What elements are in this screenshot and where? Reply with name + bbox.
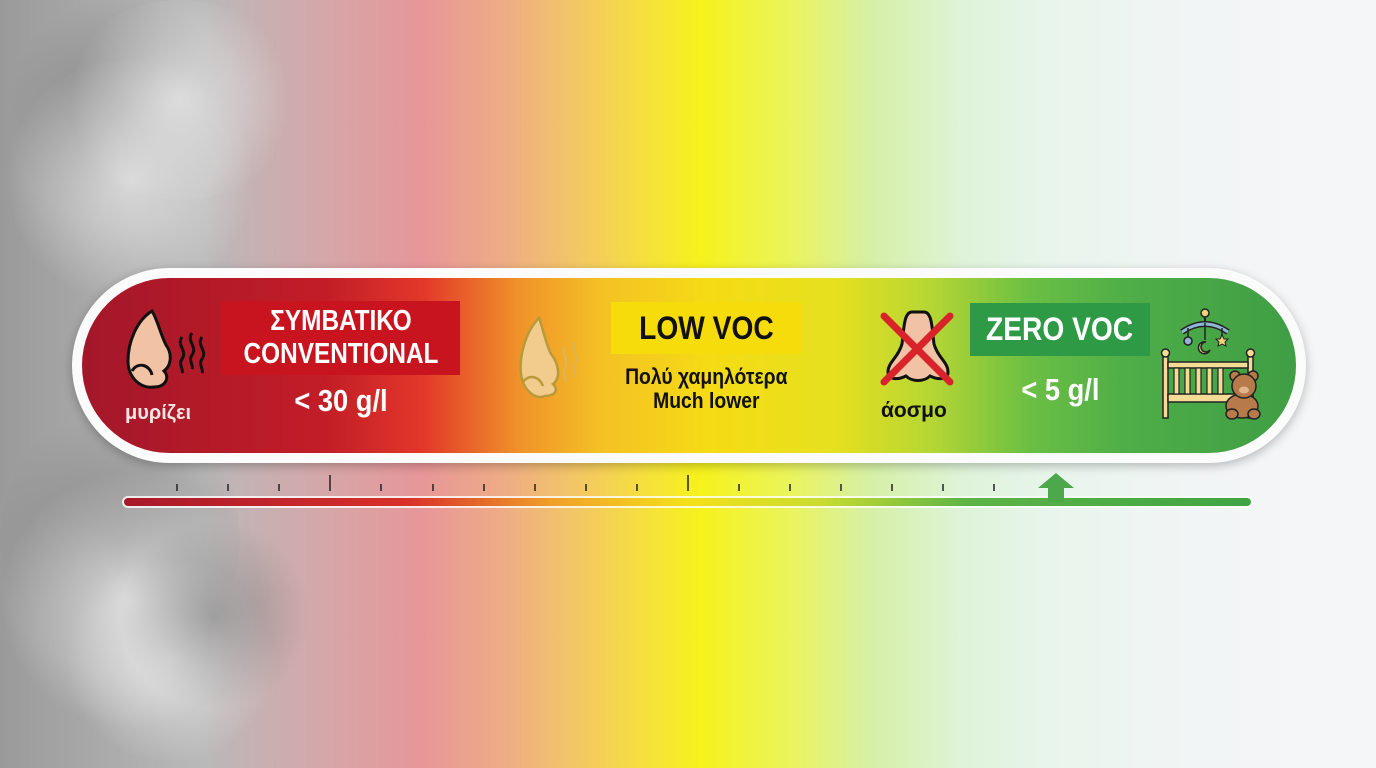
heading: ZERO VOC <box>970 303 1150 356</box>
icon: crib with teddy bear <box>1160 308 1261 420</box>
heading: ΣΥΜΒΑΤΙΚΟ CONVENTIONAL: CONVENTIONAL <box>243 338 438 370</box>
label: μυρίζει: μυρίζει <box>125 402 191 424</box>
icon: smelling nose <box>126 309 206 389</box>
panel: conventional <box>125 301 460 424</box>
background smoke <box>20 13 294 744</box>
value: < 30 g/l: < 30 g/l <box>294 383 387 418</box>
icon: faint nose <box>519 316 578 398</box>
icon: crossed nose <box>880 310 954 386</box>
heading: LOW VOC <box>611 302 801 354</box>
text: Πολύ χαμηλότερα Much lower: Much lower <box>653 388 759 413</box>
label: άοσμο: άοσμο <box>881 399 947 422</box>
heading: LOW VOC: LOW VOC <box>639 310 773 346</box>
panel: low voc <box>519 302 801 413</box>
arrow: zero voc marker <box>1038 473 1074 498</box>
main scale pill <box>72 268 1306 463</box>
heading: ΣΥΜΒΑΤΙΚΟ CONVENTIONAL <box>221 301 460 375</box>
scale bar with ticks <box>122 475 1253 508</box>
heading: ΣΥΜΒΑΤΙΚΟ CONVENTIONAL: ΣΥΜΒΑΤΙΚΟ <box>270 305 411 337</box>
heading: ZERO VOC: ZERO VOC <box>986 311 1134 347</box>
panel: zero voc <box>880 303 1261 422</box>
value: < 5 g/l: < 5 g/l <box>1021 372 1099 407</box>
text: Πολύ χαμηλότερα Much lower: Πολύ χαμηλότερα <box>625 364 787 389</box>
text: Πολύ χαμηλότερα Much lower <box>625 364 788 413</box>
